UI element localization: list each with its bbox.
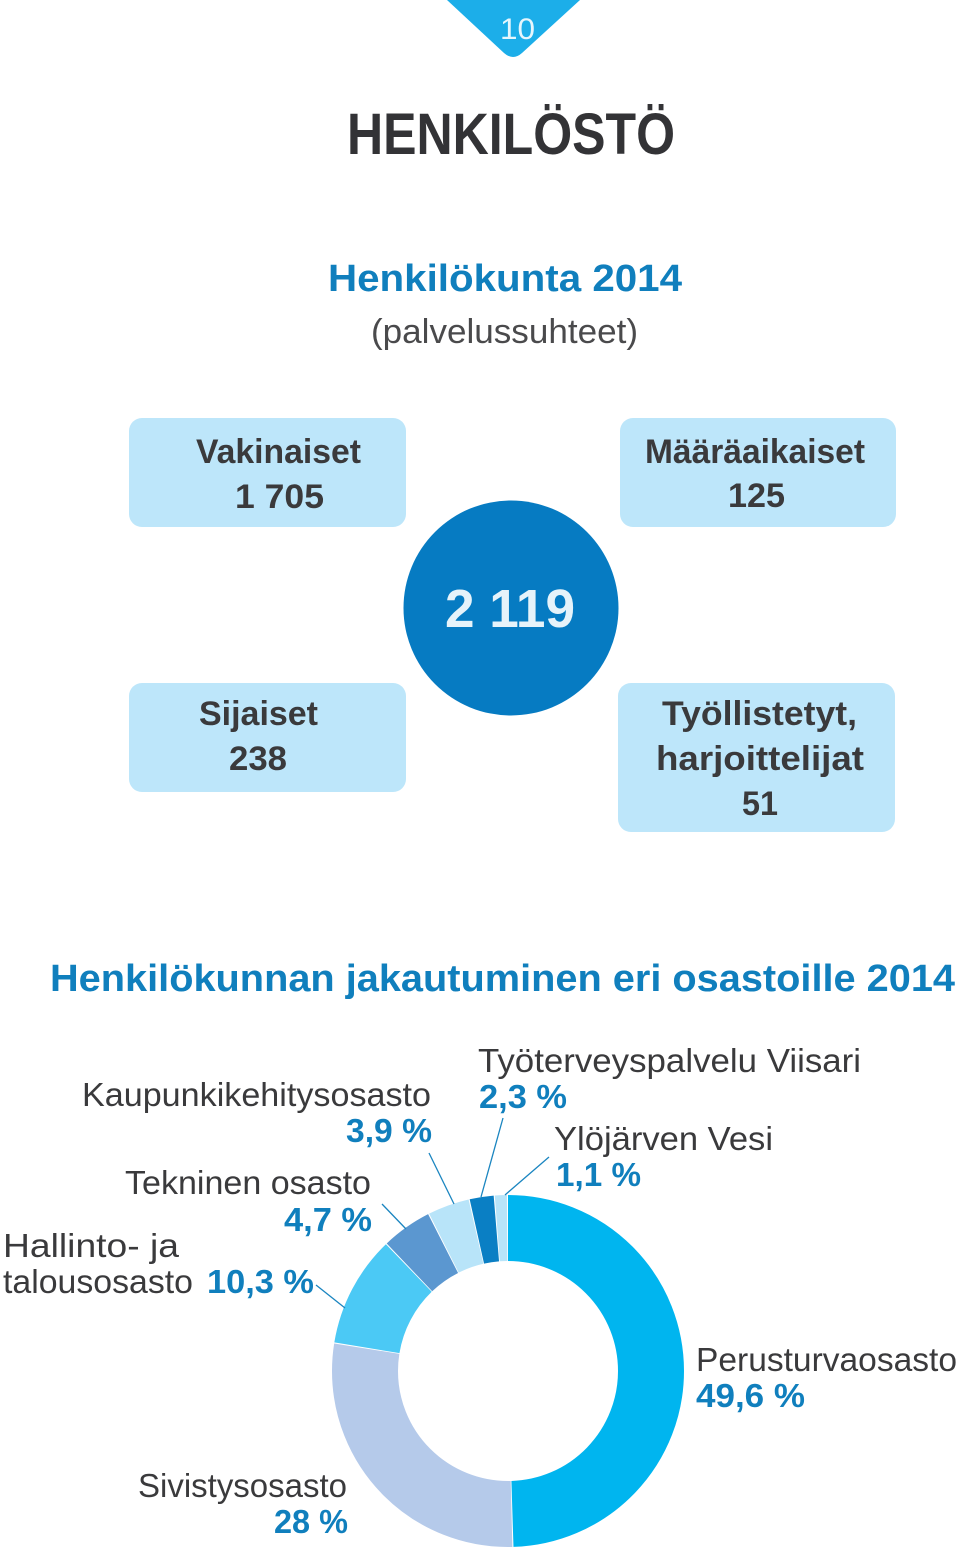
label: Sivistysosasto: Sivistysosasto bbox=[138, 1467, 347, 1504]
label: Sivistysosasto bbox=[138, 1467, 348, 1540]
label: Hallinto- ja talousosasto: Hallinto- ja bbox=[3, 1227, 180, 1264]
panel: fixed-term staff bbox=[620, 418, 896, 527]
page number badge: 10 bbox=[500, 13, 535, 46]
panel: permanent staff bbox=[129, 418, 406, 527]
label: Ylöjärven Vesi: Ylöjärven Vesi bbox=[554, 1120, 773, 1157]
label: Työterveyspalvelu Viisari bbox=[478, 1042, 861, 1115]
label: Ylöjärven Vesi bbox=[554, 1120, 773, 1193]
panel: substitutes bbox=[129, 683, 406, 792]
label: Kaupunkikehitysosasto: Kaupunkikehitysosasto bbox=[82, 1076, 431, 1113]
label: Hallinto- ja talousosasto: 10,3 % bbox=[207, 1263, 314, 1300]
label: Työterveyspalvelu Viisari: Työterveyspalvelu Viisari bbox=[478, 1042, 861, 1079]
label: Perusturvaosasto: 49,6 % bbox=[696, 1377, 805, 1414]
label: Perusturvaosasto bbox=[696, 1341, 957, 1414]
heading: staff 2014: Henkilökunta 2014 bbox=[328, 258, 682, 300]
panel: substitutes: 238 bbox=[229, 740, 287, 778]
label: Työterveyspalvelu Viisari: 2,3 % bbox=[479, 1078, 567, 1115]
label: Sivistysosasto: 28 % bbox=[274, 1503, 348, 1540]
label: Hallinto- ja talousosasto: talousosasto bbox=[3, 1263, 193, 1300]
panel: employed and trainees: Työllistetyt, bbox=[662, 695, 857, 733]
panel: employed and trainees: harjoittelijat bbox=[656, 740, 864, 778]
panel: fixed-term staff: 125 bbox=[728, 477, 785, 515]
panel: fixed-term staff: Määräaikaiset bbox=[645, 433, 865, 471]
panel: employed and trainees bbox=[618, 683, 895, 832]
heading: staff 2014 bbox=[328, 258, 682, 351]
panel: substitutes: Sijaiset bbox=[199, 695, 318, 733]
label: Tekninen osasto: 4,7 % bbox=[284, 1201, 372, 1238]
donut chart bbox=[365, 1228, 651, 1514]
total circle bbox=[404, 500, 618, 716]
panel: permanent staff: 1 705 bbox=[235, 478, 324, 516]
heading: distribution by department: Henkilökunnan jakautuminen eri osastoille 2014 bbox=[50, 958, 955, 1000]
page number badge bbox=[447, 0, 580, 57]
label: Ylöjärven Vesi: 1,1 % bbox=[556, 1156, 641, 1193]
total circle: 2 119 bbox=[445, 579, 575, 639]
heading: staff 2014: (palvelussuhteet) bbox=[371, 313, 638, 351]
panel: employed and trainees: 51 bbox=[742, 785, 778, 823]
label: Kaupunkikehitysosasto: 3,9 % bbox=[346, 1112, 432, 1149]
label: Kaupunkikehitysosasto bbox=[82, 1076, 432, 1149]
panel: permanent staff: Vakinaiset bbox=[196, 433, 361, 471]
label: Hallinto- ja talousosasto bbox=[3, 1227, 314, 1300]
label: Perusturvaosasto: Perusturvaosasto bbox=[696, 1341, 957, 1378]
label: Tekninen osasto bbox=[125, 1164, 372, 1238]
title: HENKILÖSTÖ bbox=[347, 102, 675, 167]
leader lines bbox=[316, 1118, 549, 1308]
label: Tekninen osasto: Tekninen osasto bbox=[125, 1164, 371, 1201]
